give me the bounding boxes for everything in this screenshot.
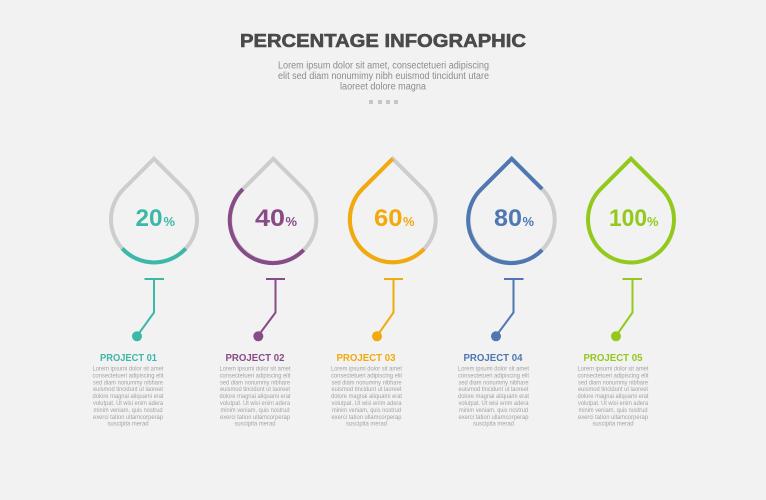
connector 3 <box>372 279 403 341</box>
project 01 text: volutpat. Ut wisi enim adera <box>93 400 164 407</box>
project 03 text: minim veniam, quis nostrud <box>332 407 402 414</box>
project 05 text: minim veniam, quis nostrud <box>578 407 648 414</box>
project 05 text <box>578 366 649 428</box>
project 01 text: euismod tincidunt ut laoreet <box>93 386 163 393</box>
project 01 text: dolore magnai aliquami erat <box>92 393 164 400</box>
subtitle text: elit sed diam nonumimy nibh euismod tincidunt utare <box>278 71 489 82</box>
project 02 text: consectetueri adipiscing elit <box>220 372 291 379</box>
project 04 text: volutpat. Ut wisi enim adera <box>458 400 529 407</box>
project 03 text: sed diam nonummy nibhare <box>332 379 402 386</box>
project 04 text: minim veniam, quis nostrud <box>459 407 529 414</box>
project 03 text: suscipita merad <box>346 421 388 428</box>
project 05 label: PROJECT 05 <box>584 352 643 364</box>
project 02 text: minim veniam, quis nostrud <box>220 407 290 414</box>
title: PERCENTAGE INFOGRAPHIC <box>240 30 526 51</box>
project 02 text: Lorem ipsumi dolor sit amet <box>220 366 291 372</box>
project 03 text <box>331 366 402 428</box>
drop gauge 100%: 100 <box>609 205 647 232</box>
project 04 text: consectetueri adipiscing elit <box>458 372 529 379</box>
drop gauge 80%: 80 <box>494 205 522 232</box>
project 03 text: Lorem ipsumi dolor sit amet <box>331 366 402 372</box>
drop gauge 40% <box>230 159 316 263</box>
project 04 text <box>458 366 529 428</box>
project 05 text: consectetueri adipiscing elit <box>578 372 649 379</box>
project 02 text: euismod tincidunt ut laoreet <box>220 386 290 393</box>
project 02 label: PROJECT 02 <box>226 352 285 364</box>
drop gauge 60%: % <box>403 214 415 229</box>
subtitle text: Lorem ipsum dolor sit amet, consectetueri adipiscing <box>278 60 489 72</box>
project 01 text: suscipita merad <box>108 421 149 428</box>
drop gauge 80% <box>468 159 555 263</box>
project 05 text: Lorem ipsumi dolor sit amet <box>578 366 649 372</box>
project 04 text: euismod tincidunt ut laoreet <box>458 386 529 393</box>
project 03 label: PROJECT 03 <box>336 352 396 364</box>
project 05 text: euismod tincidunt ut laoreet <box>578 386 648 393</box>
project 03 text: euismod tincidunt ut laoreet <box>332 386 402 393</box>
project 02 text <box>220 366 291 428</box>
project 05 text: dolore magnai aliquami erat <box>578 393 649 400</box>
project 02 text: suscipita merad <box>234 421 276 428</box>
project 04 text: suscipita merad <box>473 421 515 428</box>
project 04 label: PROJECT 04 <box>464 352 523 364</box>
drop gauge 20%: % <box>164 214 175 229</box>
project 04 text: sed diam nonummy nibhare <box>458 379 529 386</box>
project 01 text: minim veniam, quis nostrud <box>94 407 163 414</box>
project 01 text: sed diam nonummy nibhare <box>93 379 164 386</box>
project 01 text: exerci tation ullamcorperap <box>93 414 164 421</box>
drop gauge 100%: % <box>647 214 659 229</box>
project 05 text: exerci tation ullamcorperap <box>578 414 649 421</box>
project 02 text: sed diam nonummy nibhare <box>220 379 291 386</box>
project 01 label: PROJECT 01 <box>100 352 157 364</box>
project 03 text: consectetueri adipiscing elit <box>331 372 402 379</box>
project 03 text: dolore magnai aliquami erat <box>331 393 402 400</box>
project 05 text: sed diam nonummy nibhare <box>578 379 649 386</box>
project 05 text: suscipita merad <box>592 421 634 428</box>
project 05 text: volutpat. Ut wisi enim adera <box>578 400 649 407</box>
subtitle text: laoreet dolore magna <box>340 82 426 92</box>
project 03 text: exerci tation ullamcorperap <box>332 414 402 421</box>
drop gauge 60%: 60 <box>374 205 402 232</box>
divider dots <box>369 100 398 104</box>
drop gauge 40%: % <box>286 214 297 229</box>
drop gauge 100% <box>588 159 674 263</box>
drop gauge 20% <box>111 159 197 263</box>
project 04 text: dolore magnai aliquami erat <box>458 393 529 400</box>
project 04 text: exerci tation ullamcorperap <box>458 414 529 421</box>
project 03 text: volutpat. Ut wisi enim adera <box>332 400 402 407</box>
project 04 text: Lorem ipsumi dolor sit amet <box>458 366 529 372</box>
project 01 text <box>92 366 164 428</box>
connector 5 <box>611 279 642 341</box>
drop gauge 40%: 40 <box>255 205 285 232</box>
subtitle text <box>278 60 489 92</box>
drop gauge 80%: % <box>522 214 534 229</box>
project 02 text: dolore magnai aliquami erat <box>220 393 291 400</box>
project 01 text: consectetueri adipiscing elit <box>92 372 164 379</box>
connector 2 <box>253 279 285 341</box>
project 01 text: Lorem ipsumi dolor sit amet <box>92 366 164 372</box>
connector 4 <box>491 279 524 341</box>
connector 1 <box>132 279 164 341</box>
drop gauge 60% <box>350 159 436 263</box>
project 02 text: volutpat. Ut wisi enim adera <box>220 400 291 407</box>
drop gauge 20%: 20 <box>136 205 162 232</box>
project 02 text: exerci tation ullamcorperap <box>220 414 291 421</box>
